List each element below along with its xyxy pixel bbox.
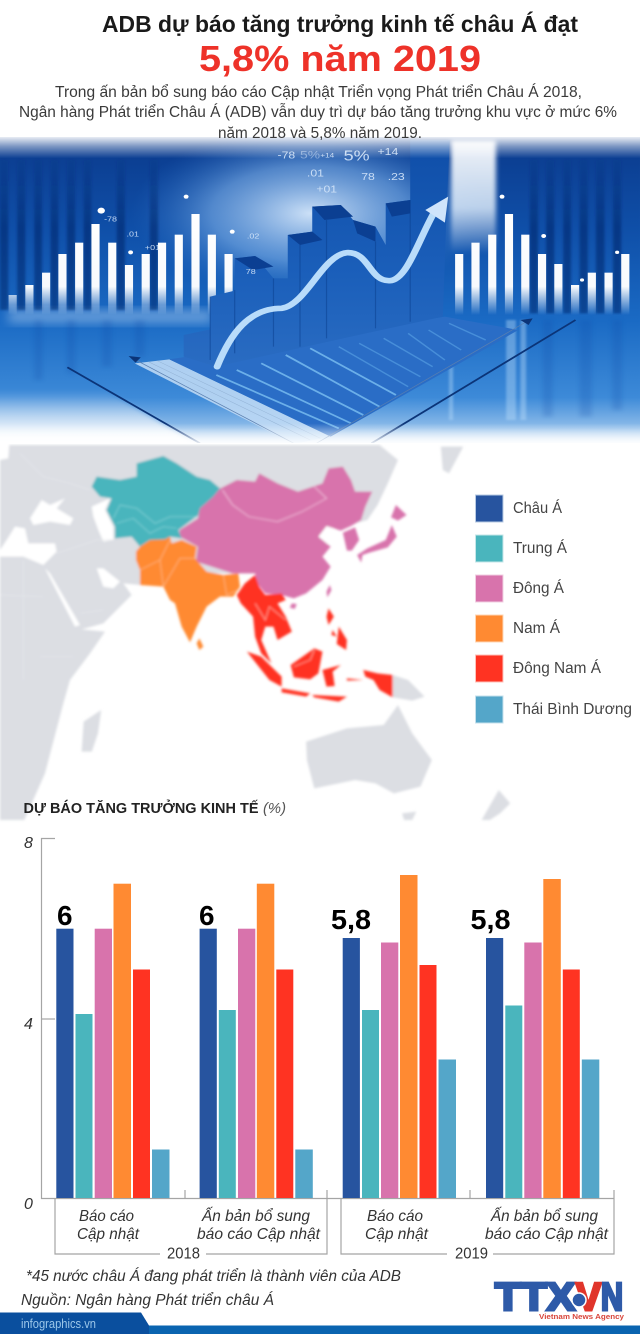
hero image: financial chart	[0, 127, 640, 447]
footnote: *45 nước châu Á đang phát triển là thành viên của ADB	[26, 1268, 401, 1285]
legend item: Châu Á: Châu Á	[513, 500, 563, 517]
legend item: Đông Nam Á	[476, 655, 602, 682]
hero numbers: +01	[145, 244, 161, 252]
logo: TTXVN: V	[576, 1276, 601, 1319]
category labels	[77, 1206, 609, 1243]
region: Southeast Asia	[237, 575, 393, 702]
hero numbers: .23	[388, 172, 405, 183]
category labels: Ấn bản bổ sung	[490, 1206, 598, 1225]
legend item: Trung Á: Trung Á	[513, 540, 568, 557]
title: ADB dự báo tăng trưởng kinh tế châu Á đạt	[102, 10, 578, 37]
value labels: 6	[57, 900, 72, 931]
category labels: Ấn bản bổ sung	[201, 1206, 310, 1225]
glow band behind bar bases	[8, 310, 212, 323]
category labels: Báo cáo	[79, 1208, 134, 1225]
region: East Asia	[180, 467, 407, 609]
rising curve arrow	[217, 207, 438, 367]
footer band	[0, 1312, 640, 1334]
floor plane with stripes	[169, 317, 518, 437]
legend item: Trung Á	[476, 535, 568, 562]
legend item: Đông Á	[476, 575, 565, 602]
hero numbers: 78	[246, 268, 256, 276]
region: South Asia	[136, 537, 240, 650]
value labels: 5,8	[470, 904, 510, 935]
chart heading: (%)	[263, 800, 286, 817]
intro paragraph	[19, 84, 617, 142]
logo: TTXVN: TTX	[495, 1276, 575, 1319]
intro paragraph: Trong ấn bản bổ sung báo cáo Cập nhật Triển vọng Phát triển Châu Á 2018,	[55, 84, 582, 101]
legend item: Đông Á: Đông Á	[513, 580, 565, 597]
title	[102, 10, 578, 79]
intro paragraph: năm 2018 và 5,8% năm 2019.	[218, 125, 422, 142]
hero numbers: -78	[278, 150, 295, 161]
hero numbers	[104, 147, 405, 276]
legend item: Nam Á	[476, 615, 561, 642]
legend item: Đông Nam Á: Đông Nam Á	[513, 660, 602, 677]
hero numbers: .01	[127, 230, 139, 238]
faint borders	[0, 453, 113, 680]
logo: TTXVN	[495, 1276, 625, 1321]
gray land: west	[0, 445, 140, 820]
category labels: báo cáo Cập nhật	[485, 1226, 609, 1243]
category labels: báo cáo Cập nhật	[197, 1226, 321, 1243]
axis labels	[24, 835, 33, 1213]
hero numbers: -78	[104, 215, 118, 223]
year labels: 2018	[167, 1246, 200, 1262]
faint stripes below bars	[34, 320, 622, 417]
hero numbers: +14	[378, 147, 398, 158]
hero numbers: +01	[316, 185, 337, 195]
axis labels: 8	[24, 835, 33, 852]
bars group: 2018 supplement	[200, 884, 313, 1198]
hero numbers: 5%	[300, 148, 320, 161]
bars group: 2018 report	[56, 884, 169, 1198]
footer band: infographics.vn	[21, 1317, 96, 1331]
right white bars	[455, 214, 629, 317]
bars group: 2019 supplement	[486, 879, 599, 1198]
legend item: Thái Bình Dương: Thái Bình Dương	[513, 701, 632, 718]
title: 5,8% năm 2019	[199, 38, 481, 79]
gray land: east and south	[82, 445, 510, 820]
3D blocks	[184, 140, 450, 367]
pale grid margin	[134, 359, 322, 433]
value labels: 5,8	[331, 904, 371, 935]
map of Asia	[0, 445, 510, 820]
hero numbers: 78	[361, 172, 375, 183]
axes	[42, 838, 614, 1198]
intro paragraph: Ngân hàng Phát triển Châu Á (ADB) vẫn duy trì dự báo tăng trưởng khu vực ở mức 6%	[19, 104, 617, 121]
hero numbers: .01	[307, 169, 324, 179]
bar chart	[24, 835, 614, 1262]
hero numbers: 5%	[344, 148, 370, 164]
axis labels: 4	[24, 1016, 33, 1033]
logo: TTXVN: Vietnam News Agency	[539, 1312, 625, 1321]
year brackets	[55, 1199, 614, 1254]
legend item: Nam Á: Nam Á	[513, 620, 561, 637]
hero numbers: .02	[247, 232, 260, 240]
legend item: Châu Á	[476, 495, 563, 522]
legend	[476, 495, 632, 723]
value labels	[57, 900, 510, 935]
category labels: Báo cáo	[367, 1208, 423, 1225]
left white bars	[9, 214, 233, 317]
legend item: Thái Bình Dương	[476, 696, 632, 723]
category labels: Cập nhật	[77, 1226, 140, 1243]
axis labels: 0	[24, 1196, 33, 1213]
year labels	[167, 1246, 488, 1262]
bars group: 2019 report	[343, 875, 456, 1198]
seas	[0, 498, 120, 627]
chart heading: DỰ BÁO TĂNG TRƯỞNG KINH TẾ	[24, 799, 259, 817]
value labels: 6	[199, 900, 214, 931]
region: Central Asia	[92, 456, 220, 547]
logo: TTXVN: N	[601, 1276, 623, 1319]
hero numbers: +14	[320, 151, 334, 159]
year labels: 2019	[455, 1246, 488, 1262]
white cloud lower left	[0, 392, 188, 441]
category labels: Cập nhật	[365, 1226, 429, 1243]
source: Nguồn: Ngân hàng Phát triển châu Á	[21, 1292, 274, 1309]
